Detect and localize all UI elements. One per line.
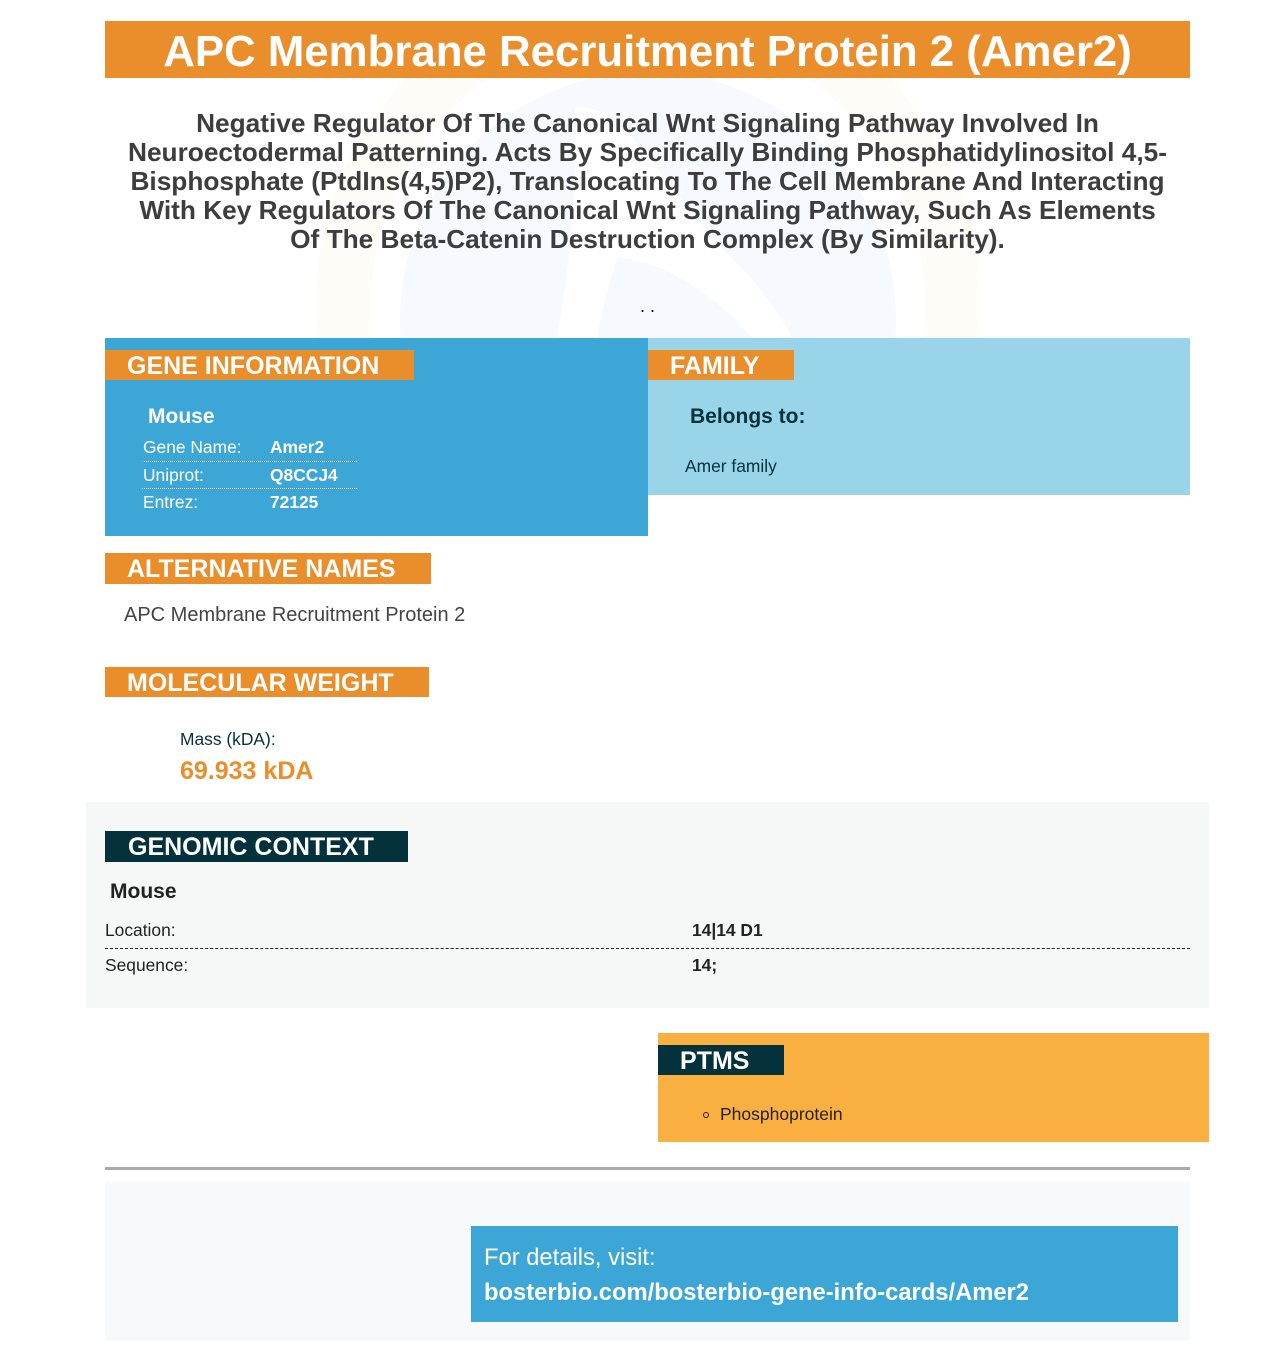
callout: details link: [471, 1226, 1178, 1322]
species label: Mouse: [110, 880, 177, 903]
title banner: APC Membrane Recruitment Protein 2 (Amer2): [163, 27, 1132, 76]
gene name row: Gene Name:: [143, 437, 242, 457]
description text: With Key Regulators Of The Canonical Wnt Signaling Pathway, Such As Elements: [139, 195, 1156, 225]
species label: Mouse: [148, 405, 215, 428]
belongs to label: Belongs to:: [690, 405, 806, 428]
gene name row: Amer2: [270, 437, 324, 457]
separator dots: . .: [640, 296, 655, 316]
entrez row: Entrez:: [143, 492, 198, 512]
heading: family: FAMILY: [670, 352, 759, 380]
location row: 14|14 D1: [692, 920, 763, 940]
heading: alternative names: ALTERNATIVE NAMES: [127, 555, 396, 583]
location row: [105, 917, 1190, 949]
description text: Negative Regulator Of The Canonical Wnt Signaling Pathway Involved In: [196, 108, 1099, 138]
uniprot row: [142, 461, 357, 489]
heading: gene information: GENE INFORMATION: [127, 352, 379, 380]
heading: ptms: PTMS: [680, 1047, 749, 1075]
description text: Of The Beta-Catenin Destruction Complex (By Similarity).: [290, 224, 1005, 254]
gene details table: [142, 437, 357, 512]
url: bosterbio.com/bosterbio-gene-info-cards/Amer2: [484, 1279, 1029, 1306]
panel: genomic context: [86, 802, 1209, 1008]
panel: gene information: [105, 338, 648, 536]
uniprot row: Uniprot:: [143, 465, 204, 485]
gene name row: [142, 433, 357, 462]
sequence row: 14;: [692, 955, 717, 975]
mass value: 69.933 kDA: [180, 757, 313, 785]
panel: family: [648, 338, 1190, 495]
description text: Neuroectodermal Patterning. Acts By Specifically Binding Phosphatidylinositol 4,5-: [128, 137, 1167, 167]
alternative names text: APC Membrane Recruitment Protein 2: [124, 604, 465, 626]
bullet marker: [703, 1112, 709, 1118]
background watermark logo: [400, 78, 896, 338]
entrez row: [143, 492, 318, 512]
heading: ptms: [658, 1045, 784, 1075]
panel: footer: [105, 1182, 1190, 1341]
mass label: Mass (kDA):: [180, 729, 276, 749]
description text: [128, 108, 1167, 254]
uniprot row: Q8CCJ4: [270, 465, 338, 485]
family name: Amer family: [685, 456, 777, 476]
description text: Bisphosphate (PtdIns(4,5)P2), Translocating To The Cell Membrane And Interacting: [130, 166, 1165, 196]
visit label: For details, visit:: [484, 1244, 656, 1271]
heading: molecular weight: MOLECULAR WEIGHT: [127, 669, 394, 697]
footer rule: [105, 1167, 1190, 1170]
entrez row: 72125: [270, 492, 318, 512]
sequence row: [105, 955, 717, 975]
heading: genomic context: GENOMIC CONTEXT: [128, 833, 374, 861]
heading: family: [648, 350, 794, 380]
ptm item: Phosphoprotein: [720, 1104, 843, 1124]
panel: ptms: [658, 1033, 1209, 1142]
location row: Location:: [105, 920, 176, 940]
sequence row: Sequence:: [105, 955, 188, 975]
